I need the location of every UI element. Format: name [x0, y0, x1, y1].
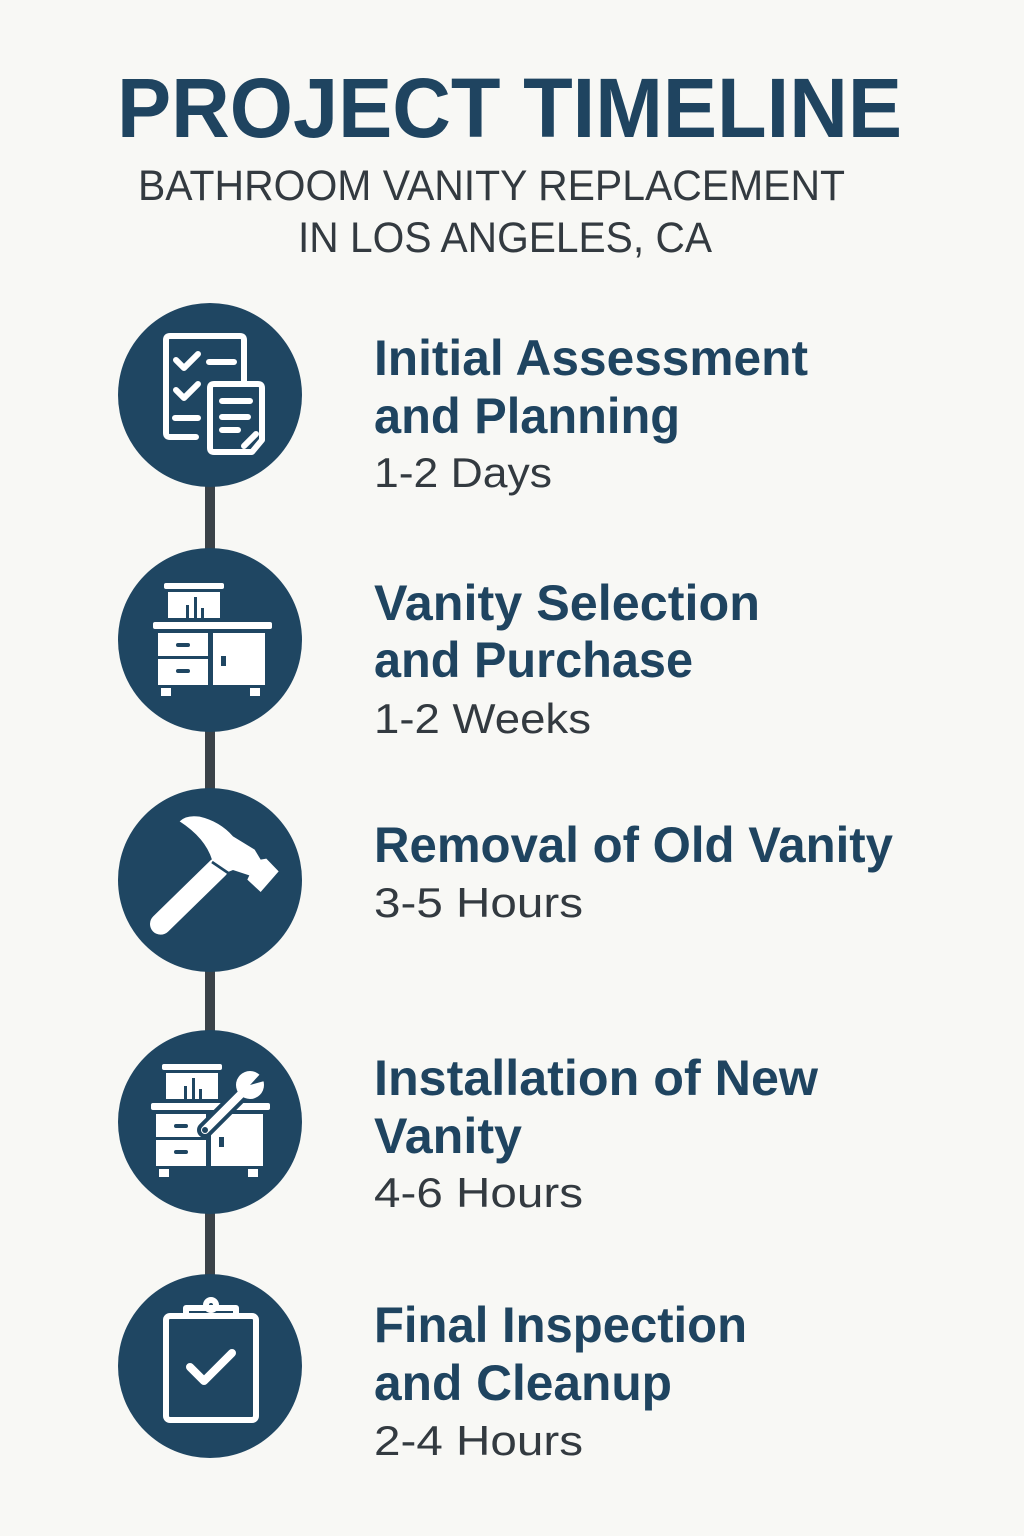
step 4 text: Installation of New — [374, 1050, 818, 1106]
timeline connector — [205, 480, 215, 1280]
step 4 text — [374, 1050, 818, 1216]
step 3 icon: hammer — [118, 788, 302, 972]
subtitle: BATHROOM VANITY REPLACEMENT — [138, 162, 845, 210]
step 1 text: 1-2 Days — [374, 449, 552, 496]
step 4 text: 4-6 Hours — [374, 1169, 583, 1216]
step 2 text: and Purchase — [374, 632, 693, 688]
step 3 text: 3-5 Hours — [374, 879, 583, 926]
step 1 text: and Planning — [374, 388, 680, 444]
step 5 icon: clipboard check — [118, 1274, 302, 1458]
subtitle — [138, 162, 845, 262]
step 3 text: Removal of Old Vanity — [374, 817, 893, 873]
step 5 text: Final Inspection — [374, 1297, 747, 1353]
title: PROJECT TIMELINE — [117, 61, 902, 155]
step 5 text: and Cleanup — [374, 1355, 672, 1411]
subtitle: IN LOS ANGELES, CA — [298, 214, 712, 262]
step 2 icon: vanity — [118, 548, 302, 732]
step 1 icon: checklist — [118, 303, 302, 487]
step 1 text — [374, 330, 808, 496]
step 5 text — [374, 1297, 747, 1464]
step 1 text: Initial Assessment — [374, 330, 808, 386]
step 2 text — [374, 575, 760, 742]
step 4 icon: vanity with wrench — [118, 1030, 302, 1214]
step 4 text: Vanity — [374, 1108, 522, 1164]
step 2 text: Vanity Selection — [374, 575, 760, 631]
step 5 text: 2-4 Hours — [374, 1417, 583, 1464]
step 2 text: 1-2 Weeks — [374, 695, 591, 742]
step 3 text — [374, 817, 893, 926]
